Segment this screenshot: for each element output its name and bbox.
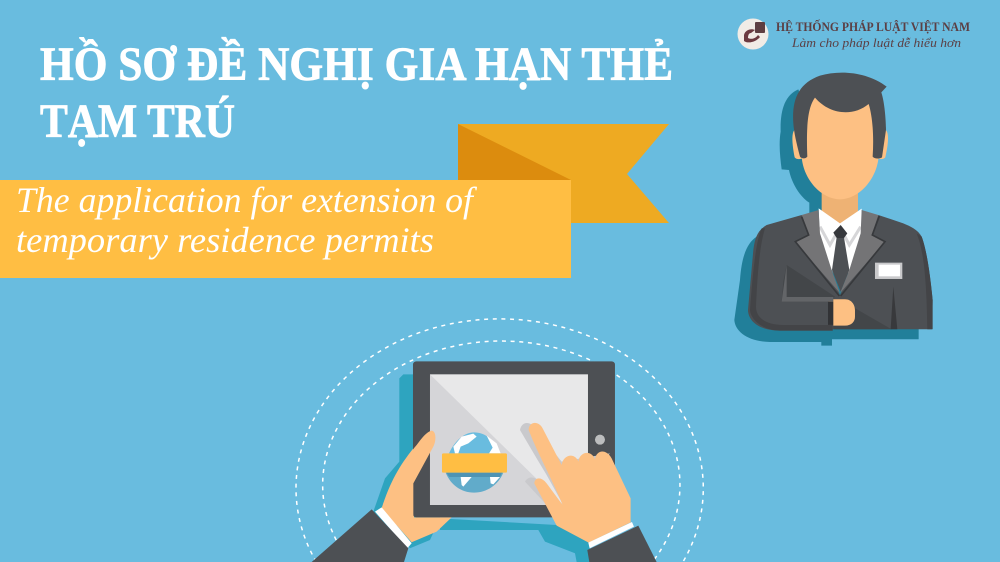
tablet home button	[595, 435, 605, 445]
necktie	[832, 225, 849, 292]
hair	[793, 73, 887, 159]
suit jacket	[748, 215, 933, 331]
globe icon	[442, 432, 507, 493]
ears	[792, 129, 888, 159]
logo brand	[738, 18, 970, 50]
left cuff	[375, 507, 412, 548]
left hand palm behind tablet	[382, 448, 452, 542]
jacket shade	[750, 228, 933, 331]
left thumb and hand front	[382, 431, 435, 528]
logo name: HỆ THỐNG PHÁP LUẬT VIỆT NAM	[776, 19, 970, 34]
illustration: businessman	[734, 73, 933, 346]
neck	[822, 188, 858, 227]
left sleeve	[312, 509, 408, 562]
title: TẠM TRÚ	[40, 94, 235, 148]
hand on jacket	[828, 299, 855, 326]
name badge	[875, 263, 902, 279]
logo tagline: Làm cho pháp luật dễ hiểu hơn	[791, 36, 961, 50]
title: HỒ SƠ ĐỀ NGHỊ GIA HẠN THẺ	[40, 36, 673, 91]
right sleeve	[587, 526, 657, 562]
figure shadow	[734, 89, 919, 346]
tablet body	[413, 361, 615, 517]
tablet screen	[430, 374, 588, 505]
icon: logo badge	[738, 18, 768, 50]
subtitle	[16, 180, 478, 260]
face	[802, 97, 879, 199]
finger shadows	[520, 423, 610, 505]
ribbon banner	[0, 124, 669, 278]
illustration: hands holding tablet	[296, 319, 703, 562]
subtitle: temporary residence permits	[16, 220, 434, 260]
subtitle: The application for extension of	[16, 180, 478, 220]
dashed signal arcs	[296, 319, 703, 562]
shirt	[819, 208, 862, 273]
right cuff	[588, 522, 634, 548]
lapels	[795, 210, 840, 293]
right hand	[529, 423, 631, 543]
title	[40, 36, 673, 148]
tablet shadow	[373, 374, 590, 562]
